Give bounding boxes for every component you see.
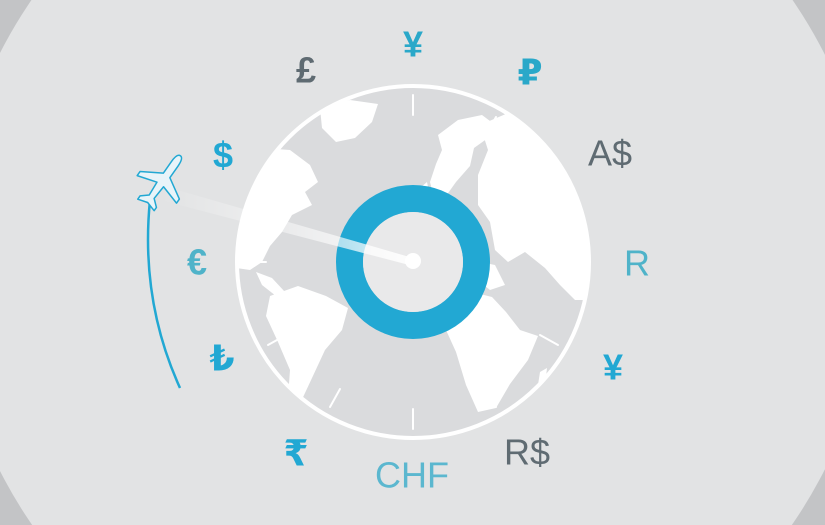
clock face with world map bbox=[236, 85, 592, 439]
africa bbox=[446, 292, 538, 412]
real: R$ bbox=[504, 432, 550, 472]
madagascar bbox=[538, 368, 547, 382]
south america bbox=[266, 286, 348, 408]
pound: £ bbox=[296, 50, 316, 90]
euro: € bbox=[187, 242, 207, 282]
flight path arc bbox=[148, 200, 180, 388]
middle east bbox=[486, 264, 505, 290]
blue donut bbox=[350, 198, 476, 326]
lira: ₺ bbox=[209, 338, 235, 378]
yen right: ¥ bbox=[603, 346, 623, 388]
contrail to center bbox=[160, 185, 413, 266]
australian dollar: A$ bbox=[588, 132, 632, 174]
yen top: ¥ bbox=[403, 24, 423, 64]
center dot bbox=[405, 253, 421, 269]
dollar: $ bbox=[213, 134, 233, 176]
rand: R bbox=[624, 242, 650, 284]
tick marks bbox=[246, 95, 580, 429]
ruble: ₽ bbox=[517, 52, 543, 92]
europe bbox=[430, 115, 490, 194]
franc: CHF bbox=[375, 454, 449, 496]
north america bbox=[236, 148, 318, 270]
greenland bbox=[320, 100, 378, 142]
central america bbox=[256, 272, 285, 296]
clock ring bbox=[237, 86, 589, 438]
asia bbox=[478, 108, 592, 300]
icon: airplane bbox=[126, 142, 200, 219]
uk bbox=[422, 182, 428, 186]
currency symbols bbox=[187, 24, 650, 496]
rupee: ₹ bbox=[283, 432, 309, 474]
